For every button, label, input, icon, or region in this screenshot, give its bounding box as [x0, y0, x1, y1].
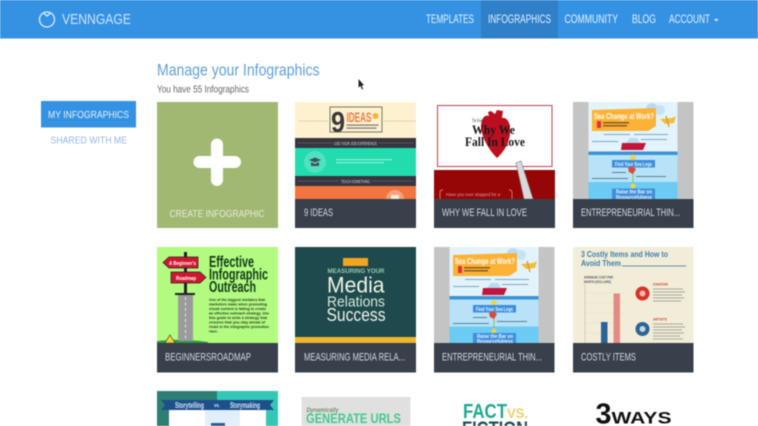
card: entrepreneurial thinking second copy: Sea Change at Work? [455, 257, 515, 266]
card: beginners roadmap: Infographic [209, 266, 268, 284]
card: fact vs fiction: FACT [463, 401, 507, 423]
nav links: COMMUNITY [564, 14, 618, 26]
logo [40, 11, 131, 28]
card: fact vs fiction: VS. [507, 405, 528, 421]
card: why we fall in love: The Science [472, 119, 485, 124]
card: entrepreneurial thinking: Raise the Bar on [616, 190, 652, 196]
card: 9 ideas: USE YOUR JOB EXPERIENCE [334, 141, 377, 146]
active nav tab [481, 0, 558, 38]
card: beginners roadmap: marketers make when promoting [209, 302, 268, 306]
top navigation bar [0, 0, 758, 38]
nav links: TEMPLATES [426, 14, 474, 26]
card: costly items [573, 247, 694, 372]
card: costly items: 3 Costly Items and How to [581, 250, 668, 259]
card: costly items: ARTISTS [653, 316, 667, 322]
card: measuring media relations: Success [326, 305, 386, 325]
card: beginners roadmap: this guide to write a strategy that [209, 315, 268, 320]
card: entrepreneurial thinking: ENTREPRENEURIAL THIN... [581, 207, 680, 219]
card: create infographic: CREATE INFOGRAPHIC [170, 208, 265, 220]
card: entrepreneurial thinking: Find Your Sea Legs [615, 162, 652, 168]
card: costly items: DONATIONS [653, 282, 668, 286]
logo: VENNGAGE [62, 11, 131, 28]
card: measuring media relations: Relations [327, 294, 385, 310]
card: beginners roadmap: Outreach [209, 279, 256, 296]
card: costly items: MONTH (DOLLARS) [584, 280, 612, 284]
card: beginners roadmap [157, 247, 278, 372]
card: entrepreneurial thinking [573, 102, 694, 228]
card: beginners roadmap: visual content is failing to create [209, 306, 267, 311]
card: beginners roadmap: rivals in the infographic promotion [209, 324, 270, 329]
sidebar: shared with me: SHARED WITH ME [50, 134, 127, 146]
card: beginners roadmap: Effective [209, 254, 254, 271]
card: storytelling vs storymaking: vs. [214, 403, 221, 409]
card: 9 ideas: IDEAS [346, 109, 372, 125]
card: storytelling vs storymaking [157, 391, 278, 426]
card: beginners roadmap: Roadmap [176, 276, 197, 282]
mouse cursor [358, 79, 364, 90]
card: costly items: Avoid Them [581, 259, 621, 268]
card: why we fall in love: Have you ever stopped for a [446, 192, 500, 198]
card: entrepreneurial thinking second copy: ENTREPRENEURIAL THIN... [442, 352, 542, 364]
card: beginners roadmap: A Beginner's [169, 261, 196, 267]
card: storytelling vs storymaking: Storymaking [230, 401, 260, 410]
card: costly items: AVERAGE COST PER [584, 276, 613, 280]
card: 9 ideas: 9 [331, 107, 345, 139]
card: 9 ideas: 9 IDEAS [304, 207, 333, 219]
card: costly items: COSTLY ITEMS [581, 352, 636, 364]
card: why we fall in love: Fall In Love [465, 134, 525, 149]
nav links: ACCOUNT [669, 14, 710, 26]
card: generate urls [302, 397, 410, 426]
card: entrepreneurial thinking: Resourcefulness [616, 195, 652, 201]
card: beginners roadmap: race. [209, 328, 218, 334]
card: create infographic [157, 102, 278, 228]
sidebar: my infographics [41, 101, 136, 128]
nav links: INFOGRAPHICS [488, 14, 551, 26]
nav links [426, 14, 718, 26]
card: entrepreneurial thinking: Sea Change at Work? [594, 112, 654, 121]
card: storytelling vs storymaking: Storytelling [175, 401, 204, 410]
card: why we fall in love: Why We [472, 122, 515, 137]
card: beginners roadmap: BEGINNERSROADMAP [165, 352, 251, 364]
page heading: Manage your Infographics [157, 62, 320, 80]
card: entrepreneurial thinking second copy: Resourcefulness [477, 339, 513, 345]
card: 9 ideas: TEACH SOMETHING [341, 179, 370, 184]
card: entrepreneurial thinking second copy: Find Your Sea Legs [476, 307, 513, 313]
card: beginners roadmap: ensures that you stay ahead of [209, 320, 266, 324]
nav links: BLOG [632, 14, 656, 26]
card: why we fall in love: WHY WE FALL IN LOVE [442, 207, 527, 219]
card: generate urls: Dynamically [306, 407, 339, 414]
card: 9 ideas [295, 102, 416, 228]
card: entrepreneurial thinking second copy [434, 247, 554, 372]
card: fact vs fiction [462, 401, 528, 426]
sidebar: my infographics: MY INFOGRAPHICS [48, 109, 129, 121]
card: generate urls: GENERATE URLS [306, 411, 401, 426]
card: measuring media relations: Media [327, 272, 385, 298]
infographic count: You have 55 Infographics [157, 84, 249, 96]
card: measuring media relations: MEASURING MEDIA RELA... [304, 352, 405, 364]
card: measuring media relations [295, 247, 416, 372]
card: measuring media relations: MEASURING YOUR [328, 269, 385, 275]
card: 3 ways [596, 398, 672, 426]
card: beginners roadmap: an effective outreach strategy. Use [209, 310, 270, 316]
card: entrepreneurial thinking second copy: Raise the Bar on [477, 334, 513, 340]
card: why we fall in love [434, 102, 555, 228]
card: beginners roadmap: One of the biggest mistakes that [209, 297, 266, 302]
